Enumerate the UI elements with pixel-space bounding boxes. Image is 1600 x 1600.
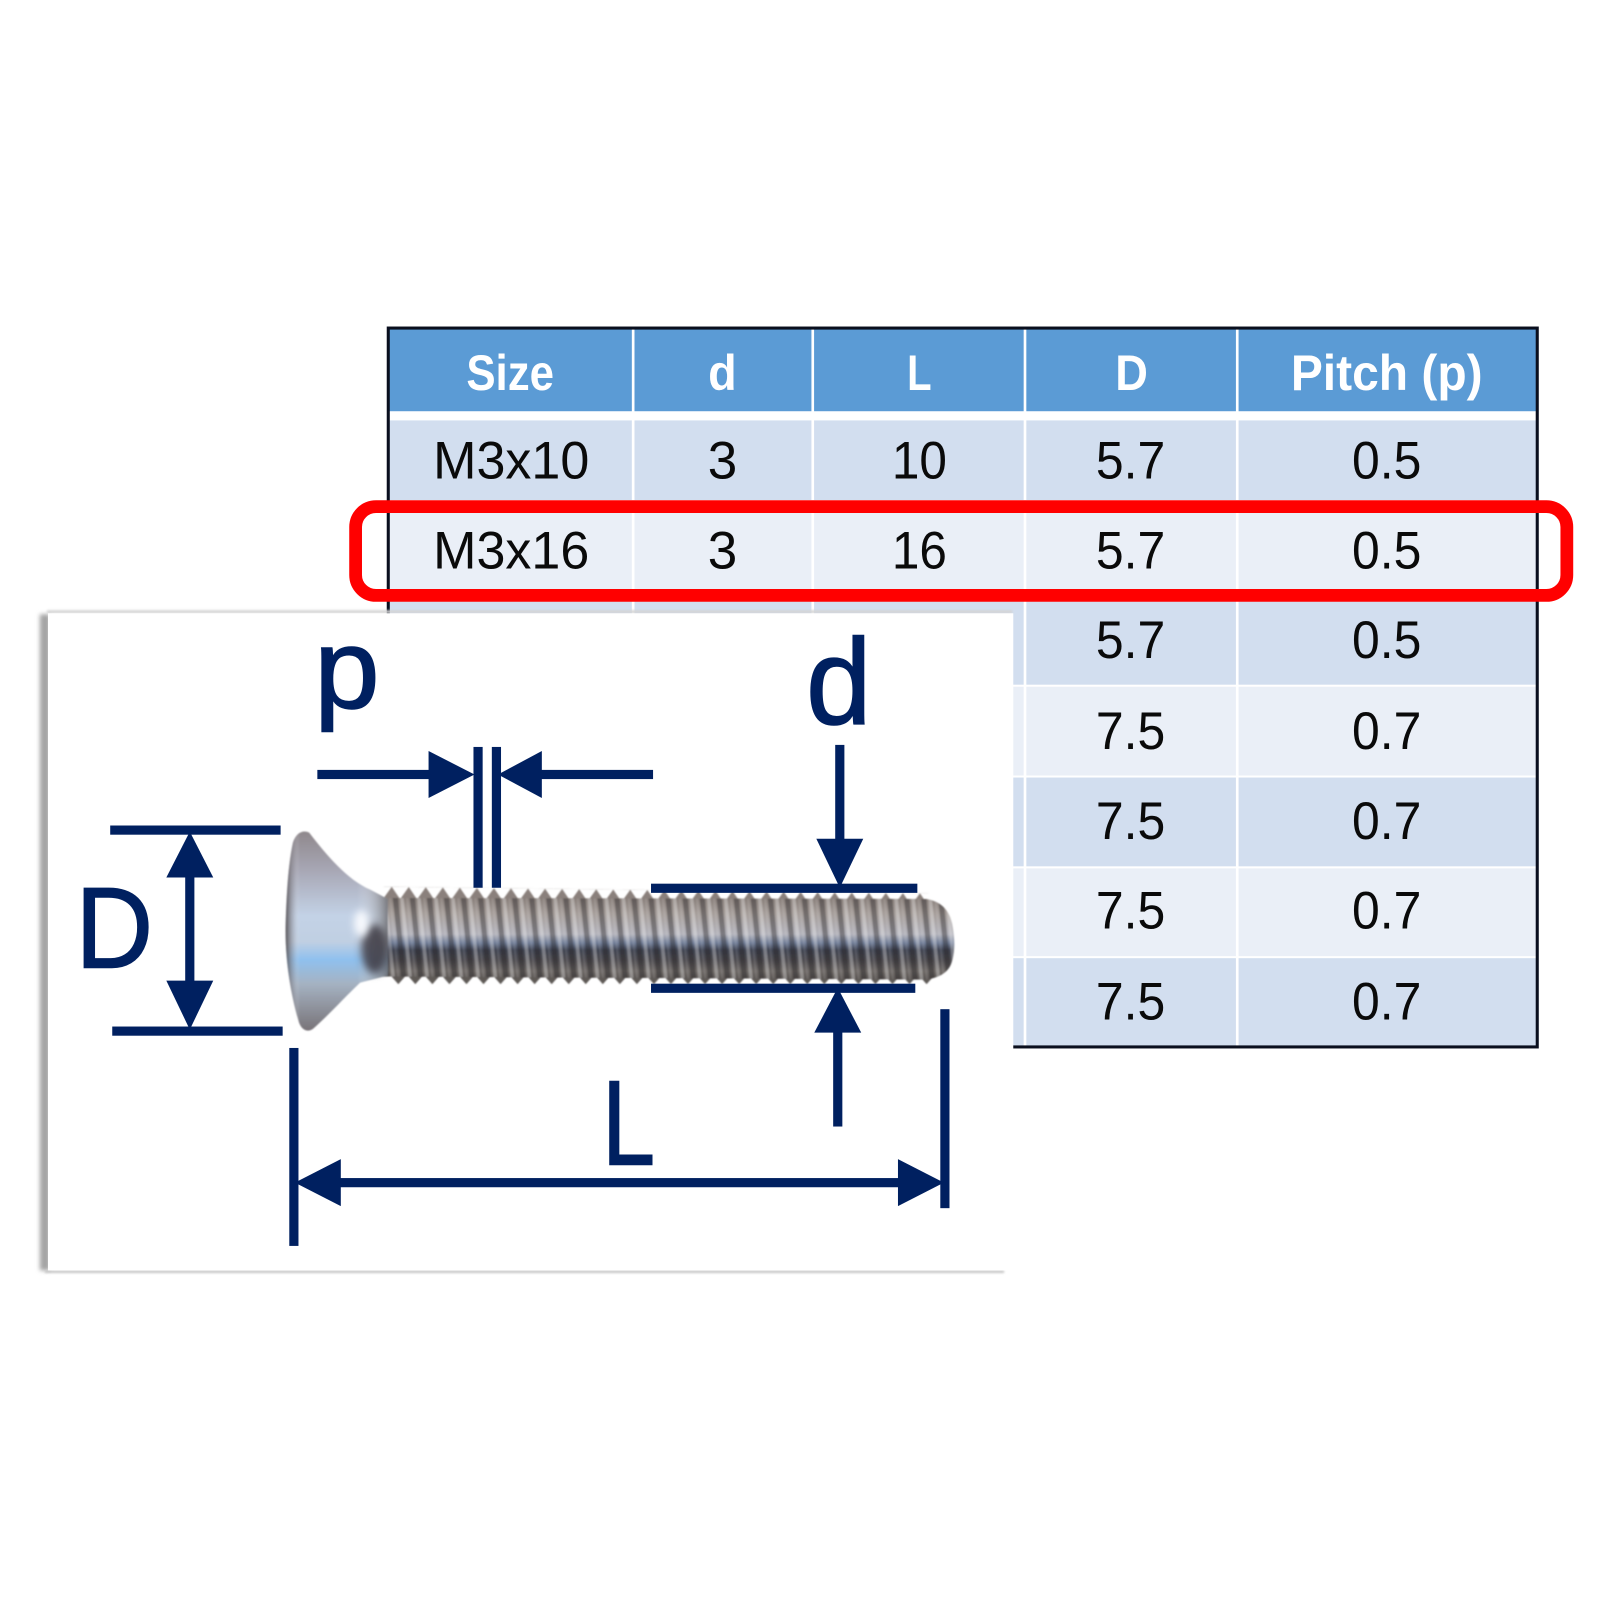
screw photo illustration (286, 832, 954, 1031)
table header row: D (1115, 345, 1148, 401)
row 5 (388, 778, 1538, 866)
row M3x10: 5.7 (1096, 432, 1165, 491)
screw shaft (367, 897, 954, 980)
dimension L (289, 1009, 949, 1246)
screw head highlight (354, 910, 368, 937)
dimension d (651, 613, 917, 1127)
row M3x10: 10 (892, 432, 947, 491)
row 6: 0.7 (1352, 882, 1421, 941)
row M3x16: M3x16 (433, 521, 589, 580)
row M3x16 (388, 502, 1538, 590)
dimension d: d (806, 613, 871, 749)
dimension D: D (76, 864, 153, 992)
row 7: 0.7 (1352, 972, 1421, 1031)
screw head (286, 832, 388, 1031)
row M3x16: 16 (892, 521, 947, 580)
row M3x10: 0.5 (1352, 432, 1421, 491)
row M3x16: 5.7 (1096, 521, 1165, 580)
row 5: 7.5 (1096, 792, 1165, 851)
row 4 (388, 687, 1538, 776)
row M3x10: 3 (708, 432, 737, 491)
row 3: 5.7 (1096, 611, 1165, 670)
row 7 (388, 958, 1538, 1047)
dimension p (314, 606, 653, 888)
row M3x10: M3x10 (433, 432, 589, 491)
highlight: red rounded box around M3x16 (356, 507, 1567, 595)
row 4: 7.5 (1096, 702, 1165, 761)
row 7: 7.5 (1096, 972, 1165, 1031)
row M3x16: 3 (708, 521, 737, 580)
table header row (388, 328, 1538, 420)
row 4: 0.7 (1352, 702, 1421, 761)
row M3x10 (388, 420, 1538, 500)
row M3x16: 0.5 (1352, 521, 1421, 580)
table header row: Size (466, 345, 554, 401)
table header row: Pitch (p) (1291, 345, 1483, 401)
dimensions table (388, 328, 1538, 1047)
row 3 (388, 592, 1538, 685)
dimension L: L (602, 1055, 655, 1190)
table header row: d (708, 345, 737, 401)
row 5: 0.7 (1352, 792, 1421, 851)
table header row: L (907, 345, 932, 401)
panel: screw diagram (40, 606, 1013, 1273)
screw neck shading (361, 924, 388, 973)
dimension p: p (314, 606, 380, 733)
row 6 (388, 868, 1538, 956)
dimension D (76, 826, 283, 1036)
screw thread teeth (384, 887, 935, 984)
row 3: 0.5 (1352, 611, 1421, 670)
row 6: 7.5 (1096, 882, 1165, 941)
